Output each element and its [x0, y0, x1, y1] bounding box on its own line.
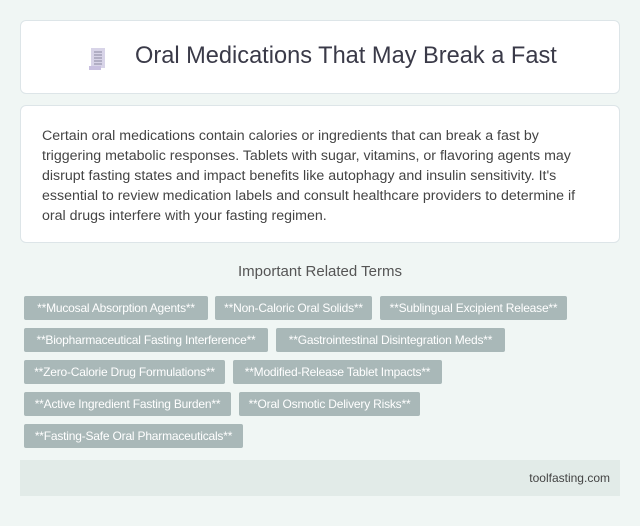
tags: **Zero-Calorie Drug Formulations** [34, 365, 215, 379]
heading: related terms: Important Related Terms [238, 263, 402, 280]
footer text: toolfasting.com [529, 471, 610, 485]
description text: Certain oral medications contain calories or ingredients that can break a fast by [42, 128, 539, 144]
tags: **Active Ingredient Fasting Burden** [35, 397, 220, 411]
tags: **Gastrointestinal Disintegration Meds** [289, 333, 492, 347]
footer [20, 460, 620, 496]
tags: **Biopharmaceutical Fasting Interference** [36, 333, 256, 347]
title panel [20, 20, 620, 94]
description text: oral drugs interfere with your fasting regimen. [42, 208, 327, 224]
description text: triggering metabolic responses. Tablets with sugar, vitamins, or flavoring agents may [42, 148, 571, 164]
tags: **Non-Caloric Oral Solids** [224, 301, 363, 315]
description text: disrupt fasting states and impact benefits like autophagy and insulin sensitivity. It's [42, 168, 556, 184]
icon: document [89, 48, 105, 70]
description text [42, 128, 576, 224]
tags: **Mucosal Absorption Agents** [37, 301, 195, 315]
tags: **Fasting-Safe Oral Pharmaceuticals** [35, 429, 232, 443]
tags: **Sublingual Excipient Release** [390, 301, 557, 315]
tags: **Oral Osmotic Delivery Risks** [249, 397, 410, 411]
description panel [20, 105, 620, 243]
title: Oral Medications That May Break a Fast [135, 43, 557, 69]
description text: essential to review medication labels and consult healthcare providers to determine if [42, 188, 575, 204]
tags: **Modified-Release Tablet Impacts** [245, 365, 430, 379]
